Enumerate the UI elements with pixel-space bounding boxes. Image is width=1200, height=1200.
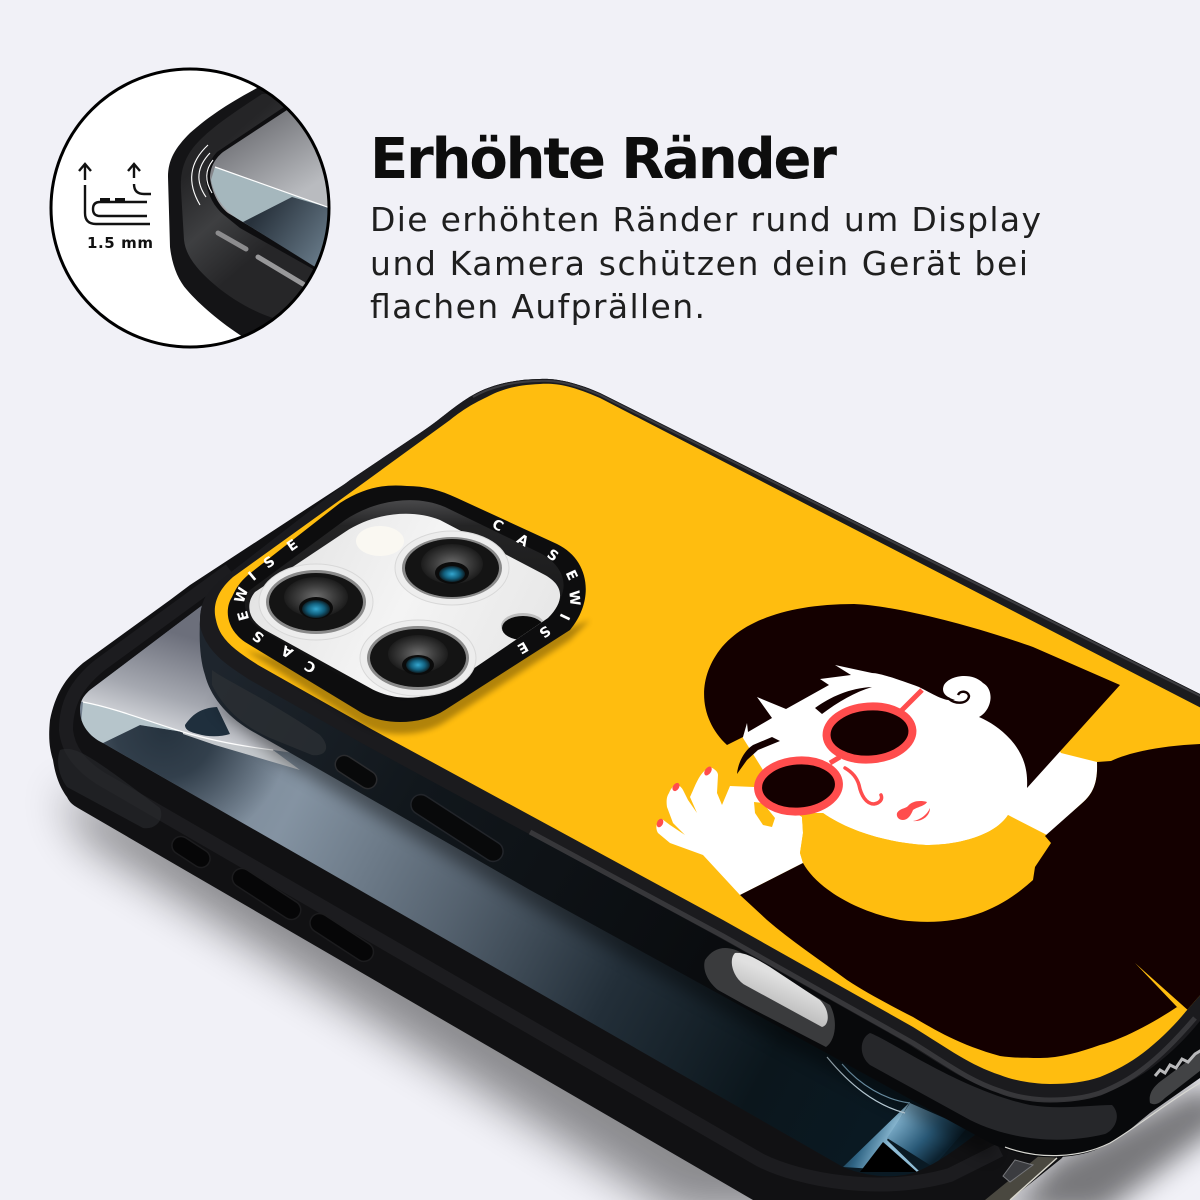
face and neck xyxy=(735,650,1097,845)
camera ring xyxy=(228,485,586,722)
ring lettering: CASEWISE: E xyxy=(514,638,531,656)
description text xyxy=(370,200,1041,326)
ring lettering: CASEWISE: E xyxy=(562,568,580,583)
back phone screen xyxy=(80,606,974,1176)
port detail xyxy=(1003,1160,1033,1182)
ring lettering: CASEWISE: A xyxy=(514,531,531,551)
phone corner close-up xyxy=(168,88,328,336)
case rim highlight xyxy=(66,570,1000,1184)
description text: und Kamera schützen dein Gerät bei xyxy=(370,244,1028,283)
nose xyxy=(845,768,882,804)
lower pale edge xyxy=(1005,1080,1200,1156)
camera glass xyxy=(249,514,560,698)
icon: raised edge diagram xyxy=(79,164,151,224)
side buttons xyxy=(168,833,377,965)
description text: Die erhöhten Ränder rund um Display xyxy=(370,200,1041,239)
ring lettering: CASEWISE: A xyxy=(279,641,296,661)
lens: upper xyxy=(395,531,509,605)
title: Erhöhte Ränder xyxy=(370,127,837,192)
ring lettering: CASEWISE: S xyxy=(250,627,267,646)
ring lettering: CASEWISE: S xyxy=(261,553,278,572)
ring lettering: CASEWISE: W xyxy=(565,590,583,606)
yellow collar xyxy=(800,813,1012,863)
zoom circle: raised edge detail xyxy=(51,69,345,350)
painted nails xyxy=(655,765,713,828)
front phone case xyxy=(200,379,1200,1158)
drop shadows under phones xyxy=(60,790,1200,1200)
speaker grille xyxy=(1150,1048,1200,1104)
silver side button xyxy=(704,948,835,1047)
ring lettering: CASEWISE: E xyxy=(235,609,253,622)
description text: flachen Aufprällen. xyxy=(370,287,705,326)
yellow sliver xyxy=(1135,963,1190,1012)
blue reflection xyxy=(827,1057,967,1172)
lens: bottom xyxy=(360,620,476,696)
lens: left xyxy=(259,564,373,640)
hair xyxy=(704,604,1120,788)
dark blob reflection xyxy=(185,707,230,736)
ring lettering: CASEWISE: C xyxy=(489,516,506,535)
eyebrows xyxy=(815,687,872,714)
microphone hole xyxy=(501,613,545,640)
metal sliver at lower right xyxy=(985,1155,1057,1200)
ring lettering: CASEWISE: C xyxy=(302,657,319,676)
textured corner pad xyxy=(58,749,161,828)
textured pad lower corner xyxy=(862,1033,1117,1140)
ring lettering: CASEWISE: I xyxy=(246,569,260,585)
label: 1.5 mm: 1.5 mm xyxy=(87,234,153,252)
arm and hand xyxy=(656,767,803,895)
shadow on screen xyxy=(215,700,1000,1158)
ring lettering: CASEWISE: S xyxy=(544,546,561,565)
ring shadow xyxy=(245,620,590,734)
ring lettering: CASEWISE xyxy=(232,516,583,676)
yellow case back with illustration xyxy=(214,384,1200,1084)
mute switch xyxy=(332,752,380,792)
textured pad near camera xyxy=(212,670,326,755)
camera module xyxy=(228,485,590,734)
ring lettering: CASEWISE: E xyxy=(284,537,301,555)
light lower wedge xyxy=(80,702,183,743)
back phone case xyxy=(49,472,1100,1200)
black body xyxy=(740,744,1200,1058)
ring lettering: CASEWISE: I xyxy=(556,611,572,622)
sunglasses xyxy=(756,690,922,814)
ear curl xyxy=(948,692,969,703)
dark wedge xyxy=(104,725,277,820)
ring lettering: CASEWISE: W xyxy=(232,585,252,605)
ring lettering: CASEWISE: S xyxy=(536,622,553,641)
flash xyxy=(356,526,404,556)
rim around yellow back xyxy=(215,381,1200,1100)
yellow blob at cheek xyxy=(754,802,775,827)
ring bevel xyxy=(245,500,564,701)
illustration: woman with red sunglasses xyxy=(655,604,1200,1058)
top reflection xyxy=(81,606,290,752)
volume button xyxy=(407,791,507,865)
lips xyxy=(897,801,930,821)
